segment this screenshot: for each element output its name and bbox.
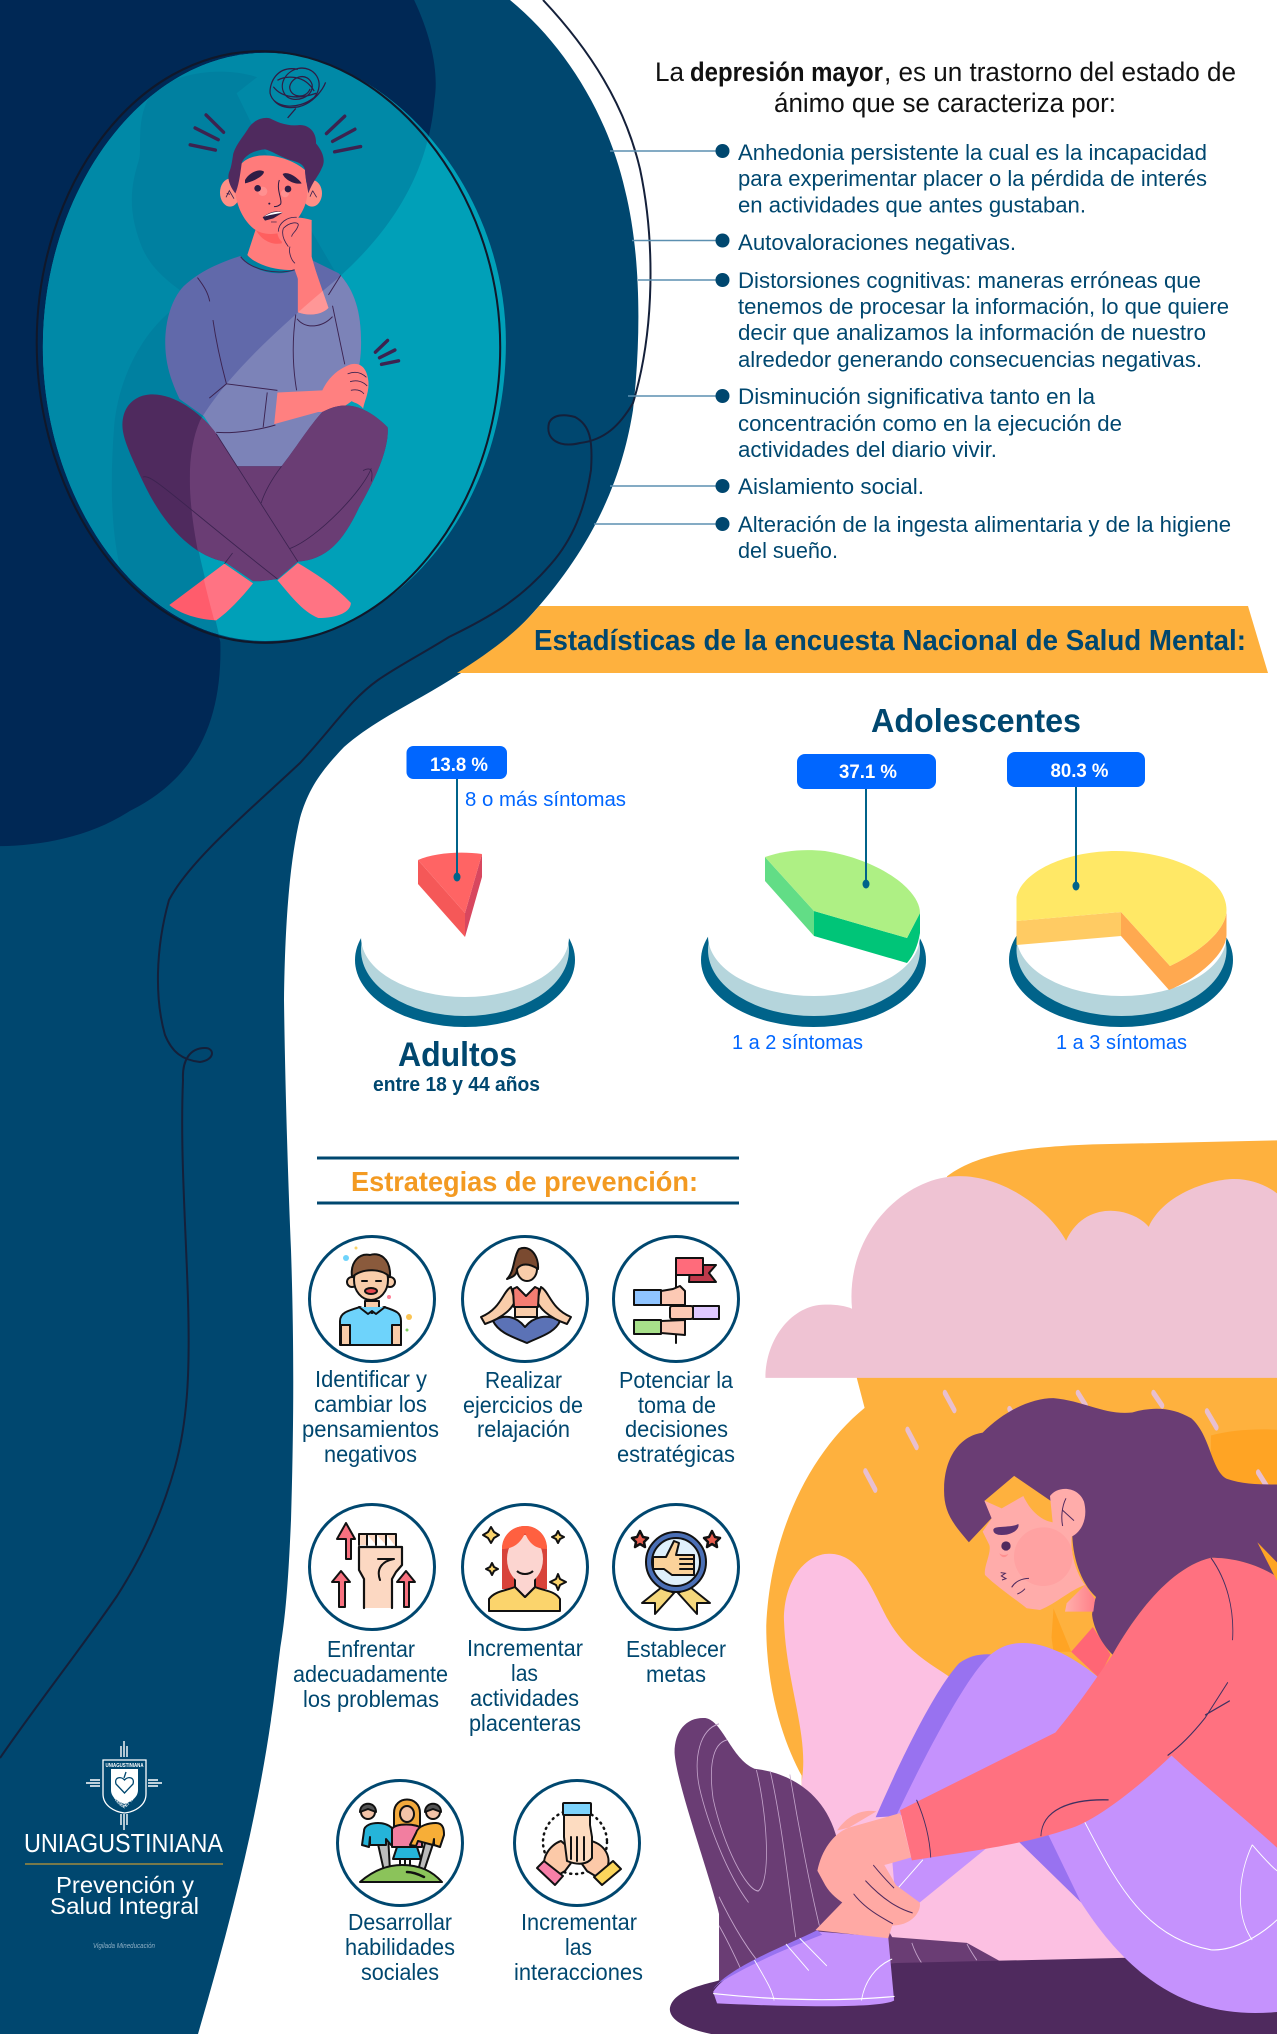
heading: Adolescentes: Adolescentes: [871, 702, 1081, 739]
symptoms list: [738, 140, 1231, 563]
trouser seams: [898, 1819, 1277, 1950]
label: pleasant activities: actividades: [470, 1685, 579, 1711]
intro heading: [655, 57, 1236, 118]
intro heading: depresión mayor: [690, 57, 883, 87]
scribble above head: [270, 68, 326, 118]
label: pleasant activities: las: [511, 1660, 538, 1686]
forearm raised: [298, 260, 328, 315]
label: goals: metas: [646, 1661, 706, 1687]
logo name: UNIAGUSTINIANA: [24, 1828, 224, 1858]
chart: adolescents pie 1 to 3 symptoms: [1007, 752, 1233, 1054]
chart: adolescents pie 1 to 3 symptoms: 80.3 %: [1050, 761, 1109, 782]
woman head: [983, 1489, 1095, 1612]
chart label: adults: [373, 1036, 540, 1096]
label: interactions: interacciones: [514, 1959, 643, 1985]
icon: three people on hill: [338, 1780, 462, 1906]
logo subtitle: [50, 1872, 199, 1919]
sweater: [900, 1558, 1277, 1860]
logo subtitle: Prevención y: [56, 1872, 194, 1898]
cheek: [1014, 1527, 1073, 1586]
symptoms list: para experimentar placer o la pérdida de interés: [738, 166, 1207, 191]
chart: adolescents pie 1 to 2 symptoms: [701, 754, 936, 1054]
logo subtitle: Salud Integral: [50, 1893, 199, 1919]
stress marks: [190, 115, 399, 364]
icon: shield: UNIAGUSTINIANA: [106, 1763, 144, 1769]
rain drops: [865, 1393, 1267, 1490]
intro heading: La: [655, 57, 685, 87]
symptoms list: en actividades que antes gustaban.: [738, 192, 1086, 218]
label: face problems: Enfrentar: [327, 1636, 415, 1662]
label: pleasant activities: Incrementar: [467, 1635, 583, 1661]
thin black looping line: [0, 0, 650, 1758]
label: goals: [626, 1636, 726, 1687]
label: decisions: estratégicas: [617, 1441, 735, 1467]
man figure: [122, 68, 399, 620]
label: relaxation: Realizar: [485, 1367, 562, 1393]
back shoe: [675, 1718, 1000, 1980]
chart: adolescents pie 1 to 2 symptoms: 37.1 %: [839, 762, 897, 783]
left foot: [169, 564, 253, 620]
label: decisions: toma de: [638, 1392, 716, 1418]
cloud: [765, 1176, 1277, 1378]
blush: [258, 187, 289, 197]
hair: [228, 118, 324, 193]
eye mark: [999, 1553, 1008, 1557]
symptoms list: Anhedonia persistente la cual es la incapacidad: [738, 140, 1207, 165]
logo footnote: Vigilada Mineducación: [93, 1943, 155, 1950]
orange triangle near shoulder: [1257, 1542, 1277, 1581]
lower arm and hand: [274, 364, 369, 424]
label: identify thoughts: negativos: [324, 1441, 417, 1467]
orange background: [766, 1140, 1277, 1960]
statistics banner: [457, 606, 1268, 673]
symptoms list: Autovaloraciones negativas.: [738, 230, 1016, 255]
label: pleasant activities: [467, 1635, 583, 1736]
sweater seams: [917, 1558, 1233, 1858]
pink blob: [784, 1554, 1152, 1966]
pants: [122, 394, 388, 581]
label: relaxation: ejercicios de: [463, 1392, 583, 1418]
chart label: adults: entre 18 y 44 años: [373, 1074, 540, 1096]
chart: adults pie: 8 o más síntomas: [465, 788, 626, 811]
intro heading: ánimo que se caracteriza por:: [774, 88, 1116, 118]
ground shadow: [670, 1954, 1277, 2034]
background panel: blue curved shape: [0, 0, 638, 2034]
ears: [220, 179, 322, 207]
symptoms list: actividades del diario vivir.: [738, 437, 997, 462]
face and ear: [983, 1489, 1085, 1610]
label: interactions: [514, 1909, 643, 1985]
bubble shaded part: [43, 53, 428, 634]
neck: [1065, 1585, 1095, 1612]
hair: [944, 1398, 1277, 1655]
icon: medal with thumb up: [614, 1504, 738, 1630]
violet shadow leg: [876, 1654, 1081, 1903]
darker orange accents: [1052, 1429, 1277, 1652]
label: relaxation: relajación: [477, 1416, 570, 1442]
red collar: [1071, 1627, 1111, 1678]
brow: [993, 1524, 1019, 1535]
label: social skills: [345, 1909, 455, 1985]
label: face problems: [293, 1636, 448, 1712]
label: identify thoughts: Identificar y: [315, 1366, 427, 1392]
bubble outline: [37, 51, 500, 643]
illustration: sad woman under cloud: [670, 1140, 1277, 2034]
front shoe: [713, 1930, 895, 2006]
heading: prevention strategies: Estrategias de prevención:: [351, 1166, 698, 1197]
illustration: man in bubble: [0, 0, 506, 846]
hand: [817, 1811, 920, 1926]
label: face problems: adecuadamente: [293, 1661, 448, 1687]
trousers: [892, 1643, 1277, 2013]
label: interactions: las: [565, 1934, 592, 1960]
logo: Uniagustiniana: [24, 1741, 224, 1950]
label: social skills: habilidades: [345, 1934, 455, 1960]
label: pleasant activities: placenteras: [469, 1710, 581, 1736]
icon: meditation: [462, 1236, 588, 1362]
icon: joined hands: [514, 1780, 640, 1906]
label: interactions: Incrementar: [521, 1909, 637, 1935]
collar: [241, 257, 298, 272]
label: social skills: sociales: [361, 1959, 439, 1985]
icon: shield: [86, 1741, 162, 1830]
label: goals: Establecer: [626, 1636, 726, 1662]
symptoms list: Aislamiento social.: [738, 474, 924, 499]
ankle: [815, 1900, 892, 1938]
right foot: [277, 563, 351, 618]
intro heading: , es un trastorno del estado de: [884, 57, 1236, 87]
fist at chin: [277, 217, 318, 280]
icon: smiling woman with sparkles: [462, 1504, 588, 1630]
label: decisions: Potenciar la: [619, 1367, 733, 1393]
chin shadow: [255, 228, 285, 244]
label: face problems: los problemas: [303, 1686, 439, 1712]
connector lines and bullets: [594, 144, 730, 531]
label: relaxation: [463, 1367, 583, 1442]
label: social skills: Desarrollar: [348, 1909, 452, 1935]
symptoms list: concentración como en la ejecución de: [738, 411, 1122, 436]
label: identify thoughts: cambiar los: [314, 1391, 427, 1417]
label: decisions: [617, 1367, 735, 1467]
icon: decisions flags and hands: [614, 1236, 738, 1362]
chart label: adults: Adultos: [398, 1036, 517, 1074]
nose mouth and ear lines: [1001, 1498, 1074, 1594]
man head: [220, 118, 324, 280]
bubble fill: [43, 53, 506, 641]
chart: adolescents pie 1 to 3 symptoms: 1 a 3 síntomas: [1056, 1031, 1187, 1054]
strategy labels: [293, 1366, 735, 1985]
neck: [247, 220, 312, 270]
symptoms list: alrededor generando consecuencias negativas.: [738, 347, 1202, 372]
sweater: [165, 256, 361, 466]
chart: adults pie: 13.8 %: [430, 755, 488, 776]
label: identify thoughts: [302, 1366, 439, 1467]
symptoms list: decir que analizamos la información de nuestro: [738, 320, 1206, 345]
brows eyes nose mouth: [245, 170, 302, 222]
icon: person with negative thoughts: [310, 1236, 434, 1362]
chart: adolescents pie 1 to 2 symptoms: 1 a 2 síntomas: [732, 1031, 863, 1054]
label: identify thoughts: pensamientos: [302, 1416, 439, 1442]
face: [235, 155, 307, 234]
dark navy blob: [0, 0, 436, 846]
symptoms list: Distorsiones cognitivas: maneras erróneas que: [738, 268, 1201, 293]
ear lines: [226, 191, 317, 199]
chart: adults pie: [355, 746, 626, 1027]
icon: raised fist with arrows: [310, 1504, 434, 1630]
symptoms list: Disminución significativa tanto en la: [738, 384, 1096, 409]
icon: shield: TRANSCENDE ET TE IPSUM: [113, 1796, 134, 1808]
symptoms list: Alteración de la ingesta alimentaria y de la higiene: [738, 512, 1231, 537]
label: decisions: decisiones: [625, 1416, 728, 1442]
eye: [1001, 1541, 1011, 1551]
symptoms list: tenemos de procesar la información, lo que quiere: [738, 294, 1229, 319]
symptoms list: del sueño.: [738, 538, 838, 563]
statistics banner: Estadísticas de la encuesta Nacional de Salud Mental:: [534, 625, 1246, 657]
